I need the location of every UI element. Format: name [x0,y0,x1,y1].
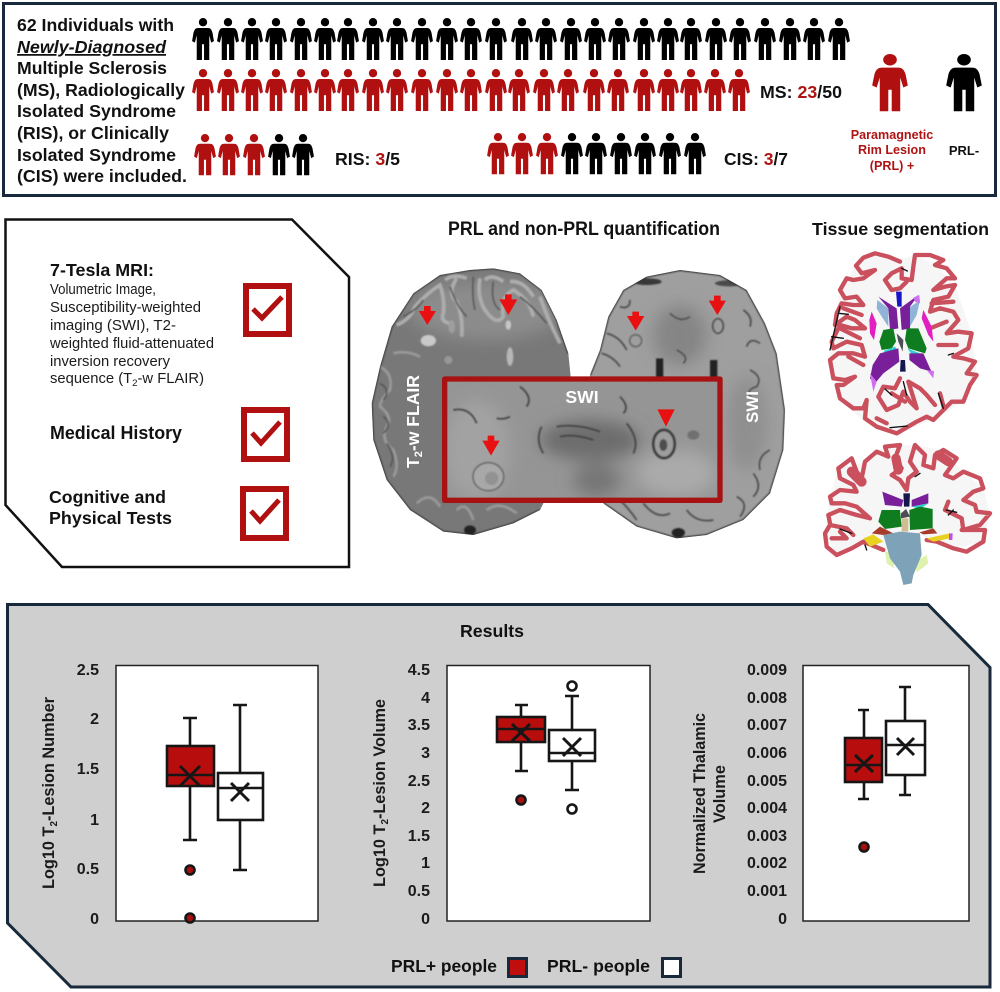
y axis ticks: 3 [421,745,430,762]
legend: PRL+ people [391,956,497,976]
PRL- box [549,682,595,814]
y axis ticks: 0.007 [747,717,787,734]
y axis ticks: 0 [90,911,99,928]
chart: T2 lesion number [40,662,318,928]
plot area [803,666,969,921]
PRL- box [218,705,263,870]
plot area [447,666,650,921]
text: cognitive and physical tests [49,487,172,528]
y axis ticks: 1 [421,855,430,872]
y axis ticks: 3.5 [408,717,430,734]
text: 7-Tesla MRI [49,260,214,389]
y axis ticks: 4.5 [408,662,430,679]
plot area [116,666,318,921]
text: 7-Tesla MRI: 7-Tesla MRI: [50,260,154,280]
text: medical history: Medical History [50,422,183,443]
legend label: PRL positive [851,128,933,173]
icons: MS PRL+ row [192,69,750,111]
cohort description text: Isolated Syndrome [17,101,176,121]
brain: SWI [583,263,790,543]
label: SWI inset: SWI [565,387,599,407]
heading: tissue segmentation: Tissue segmentation [812,219,989,239]
heading: quantification: PRL and non-PRL quantification [448,219,720,240]
chart: thalamic volume [691,662,969,928]
y axis ticks [77,662,99,928]
legend label: PRL negative: PRL- [949,143,979,158]
figure: brain MRI [367,263,790,543]
label: T2-w FLAIR: T [403,457,423,468]
legend: PRL- people [547,956,650,976]
legend icon: PRL positive [872,54,908,111]
icon: checkbox history [244,410,287,459]
y axis title: 2 [49,821,60,827]
text: 7-Tesla MRI: Volumetric Image, [50,282,156,298]
y axis ticks: 0 [778,911,787,928]
figure: tissue segmentation [825,253,990,585]
inset: zoomed SWI with red frame [443,379,721,500]
y axis ticks: 4 [421,690,430,707]
legend [391,956,680,976]
y axis ticks: 0.006 [747,745,787,762]
cohort description text: Isolated Syndrome [17,145,176,165]
legend icon: PRL negative [946,54,982,111]
icon: checkbox MRI [246,286,289,334]
PRL+ box [497,705,545,804]
arrows: lesion markers [419,294,726,456]
y axis ticks: 0.009 [747,662,787,679]
cohort description text [17,15,187,186]
legend label: PRL positive: Rim Lesion [858,143,926,157]
label: MS count: MS: 23/50 [760,82,842,102]
y axis ticks: 1.5 [408,828,430,845]
label: SWI right: SWI [743,391,762,423]
legend label: PRL positive: (PRL) + [870,159,914,173]
y axis ticks: 0.008 [747,690,787,707]
text: 7-Tesla MRI: -w FLAIR) [138,371,204,387]
text: 7-Tesla MRI: Susceptibility-weighted [50,300,201,316]
text: 7-Tesla MRI: weighted fluid-attenuated [49,336,214,352]
legend label: PRL positive: Paramagnetic [851,128,933,142]
y axis title: -Lesion Number [40,696,58,821]
text: cognitive and physical tests: Cognitive and [49,487,166,507]
y axis title: 2 [380,819,391,825]
y axis title: Normalized Thalamic [691,713,709,874]
label: T2-w FLAIR: 2 [413,451,425,457]
y axis ticks: 0.004 [747,800,787,817]
cohort description text: Newly-Diagnosed [17,37,167,57]
y axis title: -Lesion Volume [371,699,389,819]
text: 7-Tesla MRI: sequence (T [50,371,131,387]
y axis title: Log10 T [371,824,389,887]
panel: assessments [6,220,349,567]
y axis ticks [408,662,430,928]
PRL+ box [167,718,214,922]
panel: cohort [4,4,996,196]
y axis ticks [747,662,787,928]
icons: CIS row [487,133,706,174]
y axis ticks: 2.5 [408,773,430,790]
y axis ticks: 0.5 [408,883,430,900]
y axis ticks: 1 [90,812,99,829]
cohort description text: (RIS), or Clinically [17,123,169,143]
brain: T2-w FLAIR [367,263,580,540]
y axis title: Volume [711,765,729,823]
y axis ticks: 0.003 [747,828,787,845]
label: CIS count: CIS: 3/7 [724,149,788,169]
y axis ticks: 1.5 [77,761,99,778]
label: RIS count: RIS: 3/5 [335,149,400,169]
y axis ticks: 2 [421,800,430,817]
y axis ticks: 0.005 [747,773,787,790]
y axis ticks: 0.5 [77,861,99,878]
y axis ticks: 0.002 [747,855,787,872]
y axis ticks: 0.001 [747,883,787,900]
y axis ticks: 2 [90,711,99,728]
text: 7-Tesla MRI: imaging (SWI), T2- [50,318,176,334]
label: T2-w FLAIR: -w FLAIR [403,375,423,451]
y axis title: Log10 T [40,826,58,889]
cohort description text: (CIS) were included. [17,166,187,186]
segmentation: coronal slice [825,445,990,585]
text: 7-Tesla MRI: 2 [132,378,138,389]
icons: RIS row [194,134,314,175]
PRL- box [886,687,925,795]
y axis ticks: 2.5 [77,662,99,679]
text: 7-Tesla MRI: inversion recovery [50,354,171,370]
chart: T2 lesion volume [371,662,650,928]
cohort description text: Multiple Sclerosis [17,58,167,78]
text: cognitive and physical tests: Physical Tests [49,508,172,528]
cohort description text: 62 Individuals with [17,15,174,35]
cohort description text: (MS), Radiologically [17,80,185,100]
PRL+ box [845,710,882,852]
icon: checkbox tests [243,489,286,538]
segmentation: axial slice [830,253,977,433]
heading: results: Results [460,621,524,641]
y axis ticks: 0 [421,911,430,928]
panel: results [8,604,990,987]
y axis title [691,713,729,874]
icons: MS PRL- row [192,18,850,60]
